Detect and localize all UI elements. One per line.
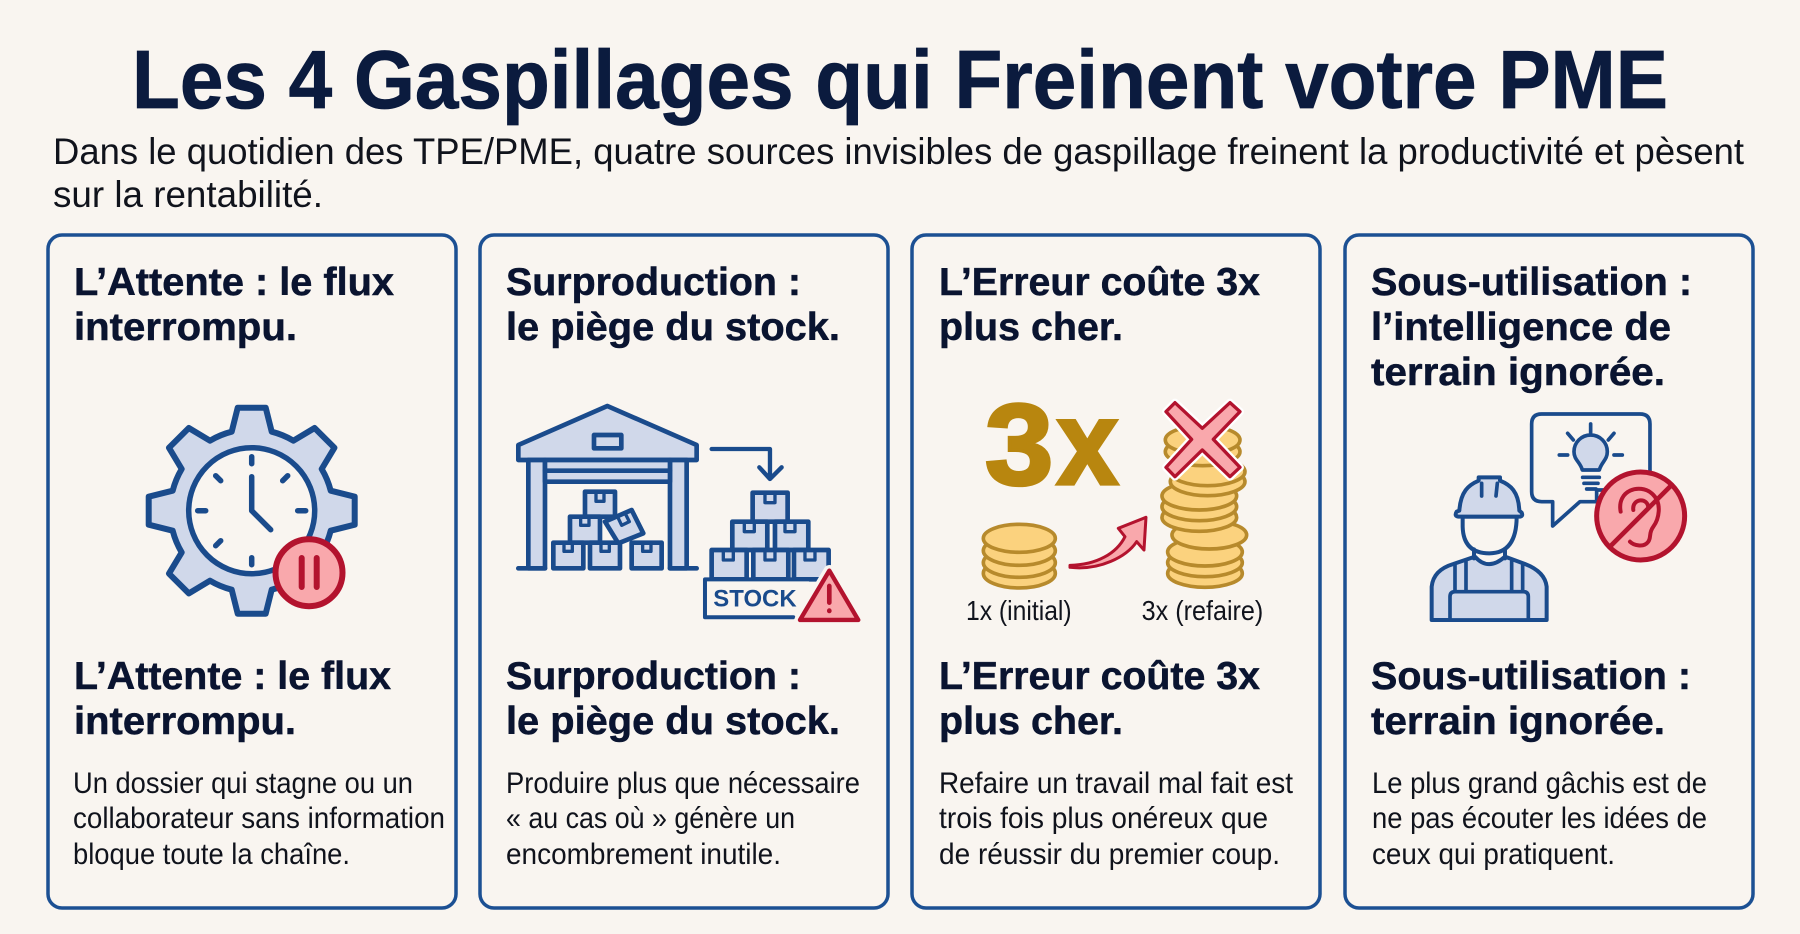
subheading: erreur [939,655,1260,743]
body: sous-utilisation: ceux qui pratiquent. [1372,838,1615,871]
panel: sous-utilisation [1345,235,1753,908]
subheading: erreur: plus cher. [939,700,1123,743]
heading: erreur [939,261,1260,349]
heading: sous-utilisation [1371,261,1692,394]
body: erreur: trois fois plus onéreux que [939,802,1268,835]
icon: coins 3x: 1x (initial) [966,595,1072,626]
body: erreur: de réussir du premier coup. [939,838,1280,871]
icon: worker, idea, no listening [1432,414,1685,620]
intro text: Dans le quotidien des TPE/PME, quatre sources invisibles de gaspillage freinent la productivité et pèsent [53,131,1745,172]
heading: attente: interrompu. [74,306,297,349]
subheading: attente: L’Attente : le flux [74,655,391,698]
body: attente: collaborateur sans information [73,802,445,835]
body: sous-utilisation [1372,767,1707,871]
heading: sous-utilisation: terrain ignorée. [1371,351,1665,394]
heading: surproduction: le piège du stock. [506,306,840,349]
icon: coins 3x [966,377,1263,626]
body: surproduction: Produire plus que nécessaire [506,767,860,800]
subheading: surproduction: le piège du stock. [506,700,840,743]
heading: attente: L’Attente : le flux [74,261,394,304]
icon: gear with clock and pause [149,408,355,614]
subheading: attente [74,655,391,743]
title: Les 4 Gaspillages qui Freinent votre PME [132,33,1668,126]
intro text: sur la rentabilité. [53,174,323,215]
subheading: sous-utilisation: terrain ignorée. [1371,700,1665,743]
intro text [53,131,1745,215]
icon: coins 3x: 3 [985,381,1053,509]
heading: attente [74,261,394,349]
icon: coins 3x: 3x (refaire) [1142,595,1263,626]
heading: sous-utilisation: l’intelligence de [1371,306,1671,349]
panel: surproduction [480,235,888,908]
body: erreur [939,767,1294,871]
heading: surproduction: Surproduction : [506,261,801,304]
icon: warehouse and stock: STOCK [713,586,797,613]
icon: coins 3x: x [1057,377,1118,510]
body: surproduction [506,767,860,871]
body: sous-utilisation: Le plus grand gâchis est de [1372,767,1707,800]
body: erreur: Refaire un travail mal fait est [939,767,1294,800]
panel: erreur [912,235,1320,908]
body: attente [73,767,445,871]
subheading: sous-utilisation: Sous-utilisation : [1371,655,1691,698]
heading: erreur: plus cher. [939,306,1123,349]
subheading: erreur: L’Erreur coûte 3x [939,655,1260,698]
icon: warehouse and stock [518,406,858,620]
subheading: attente: interrompu. [74,700,296,743]
body: surproduction: « au cas où » génère un [506,802,795,835]
body: sous-utilisation: ne pas écouter les idées de [1372,802,1707,835]
body: attente: Un dossier qui stagne ou un [73,767,413,800]
subheading: sous-utilisation [1371,655,1691,743]
heading: erreur: L’Erreur coûte 3x [939,261,1260,304]
subheading: surproduction: Surproduction : [506,655,801,698]
heading: surproduction [506,261,840,349]
body: attente: bloque toute la chaîne. [73,838,350,871]
panel: attente [48,235,456,908]
heading: sous-utilisation: Sous-utilisation : [1371,261,1692,304]
body: surproduction: encombrement inutile. [506,838,781,871]
subheading: surproduction [506,655,840,743]
